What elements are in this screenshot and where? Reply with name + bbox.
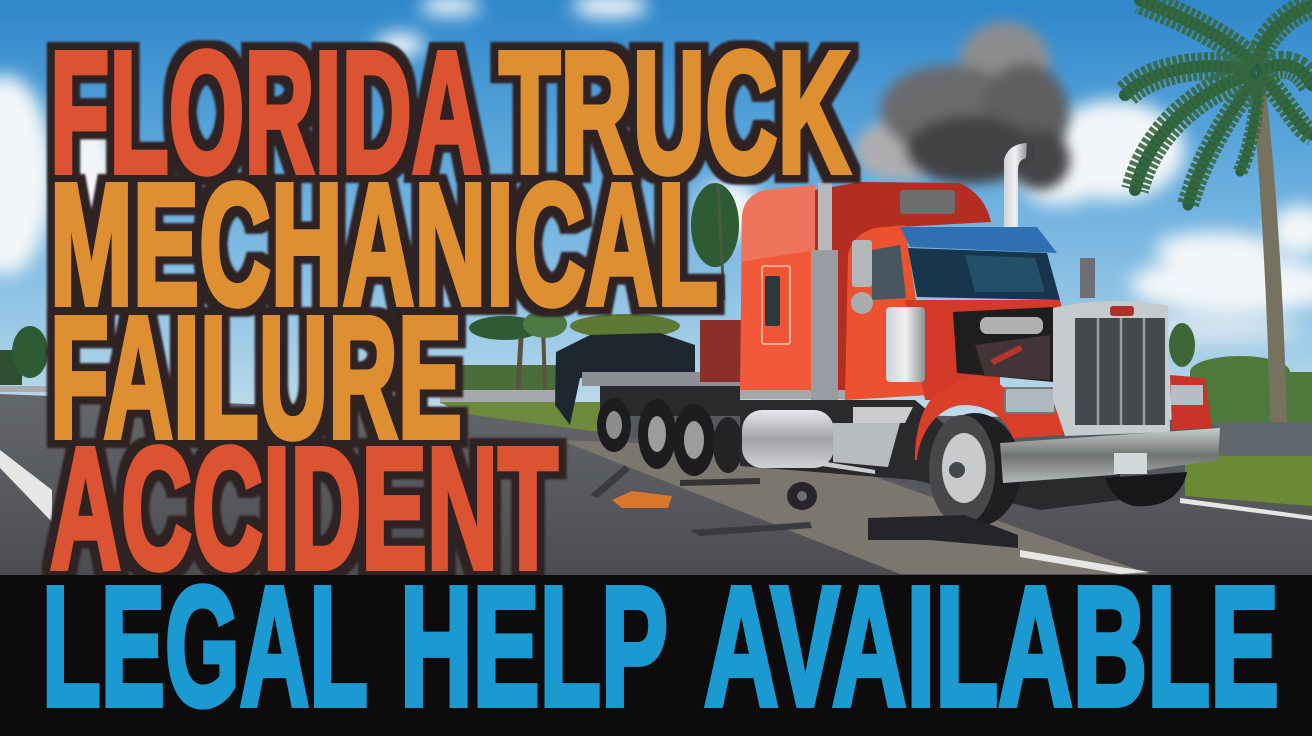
grille bbox=[1053, 301, 1170, 436]
exhaust stack bbox=[1004, 143, 1027, 228]
clouds bbox=[0, 0, 1312, 344]
front wheel bbox=[929, 413, 1021, 527]
visor bbox=[900, 227, 1057, 253]
cab upper bbox=[900, 300, 1063, 400]
shadow under truck bbox=[740, 400, 1120, 510]
large palm tree bbox=[1125, 0, 1312, 424]
title word: TRUCK: TRUCK bbox=[499, 15, 850, 209]
side mirror bbox=[851, 240, 873, 314]
roof marker panel bbox=[900, 190, 955, 214]
sleeper side panel bbox=[740, 185, 815, 392]
windshield bbox=[908, 248, 1060, 300]
front fender bbox=[915, 376, 1063, 460]
sleeper bottom trim bbox=[740, 390, 850, 399]
grass verge bbox=[440, 402, 1312, 506]
ground base bbox=[0, 400, 1312, 576]
background sky bbox=[0, 0, 1312, 420]
road lane markings bbox=[0, 450, 1312, 574]
semi truck bbox=[740, 143, 1220, 527]
step and toolbox bbox=[815, 407, 913, 474]
guardrail left bbox=[0, 386, 60, 392]
bottom banner bbox=[0, 552, 1312, 736]
engine pipes bbox=[980, 317, 1043, 334]
distant tree line bbox=[0, 323, 1312, 428]
side window bbox=[872, 245, 906, 300]
sleeper roof fairing bbox=[815, 182, 991, 395]
background palms bbox=[12, 183, 739, 392]
road side shoulder bbox=[560, 440, 1150, 574]
smoke plume bbox=[855, 22, 1070, 190]
bumper bbox=[1000, 428, 1220, 483]
far front wheel bbox=[1105, 472, 1187, 506]
guardrail right bbox=[1215, 422, 1312, 456]
flatbed with wrecked vehicle bbox=[555, 320, 743, 476]
fuel tank bbox=[742, 410, 834, 468]
debris on road bbox=[590, 465, 1018, 548]
air cylinder bbox=[886, 307, 925, 382]
title text block bbox=[50, 15, 850, 605]
headlight bbox=[1005, 388, 1055, 413]
road surface bbox=[0, 394, 1312, 576]
cab door bbox=[845, 225, 930, 400]
engine block bbox=[975, 335, 1050, 380]
sleeper window bbox=[762, 266, 790, 344]
title word: ACCIDENT: ACCIDENT bbox=[50, 411, 558, 605]
engine bay bbox=[953, 307, 1053, 382]
chrome stack bbox=[811, 183, 838, 400]
title word: FLORIDA: FLORIDA bbox=[50, 15, 482, 209]
title word: MECHANICAL: MECHANICAL bbox=[50, 147, 718, 341]
guardrail centre bbox=[440, 390, 555, 404]
title word: FAILURE: FAILURE bbox=[50, 280, 462, 474]
right fender bbox=[1170, 375, 1212, 430]
right mirror bbox=[1080, 258, 1095, 298]
grille badge bbox=[1110, 306, 1134, 316]
